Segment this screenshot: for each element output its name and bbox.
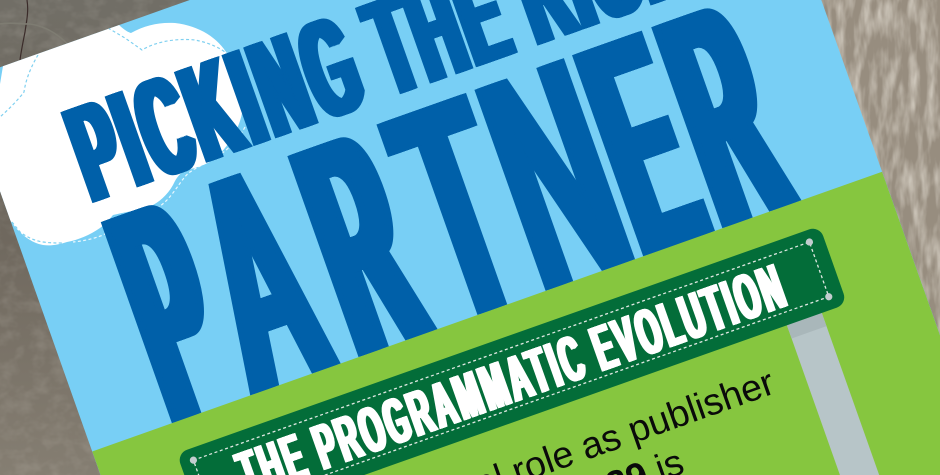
heading: partner [79,0,818,475]
poster page: T [358,30,556,387]
street sign [177,226,847,475]
signpost [785,307,900,475]
poster page: R [266,66,454,419]
grass panel [92,172,940,475]
poster page: N [448,0,660,355]
heading: picking the right [51,0,745,231]
poster page: A [160,100,360,457]
cloud [0,22,246,246]
poster page: P [79,135,260,475]
body text [272,361,779,475]
